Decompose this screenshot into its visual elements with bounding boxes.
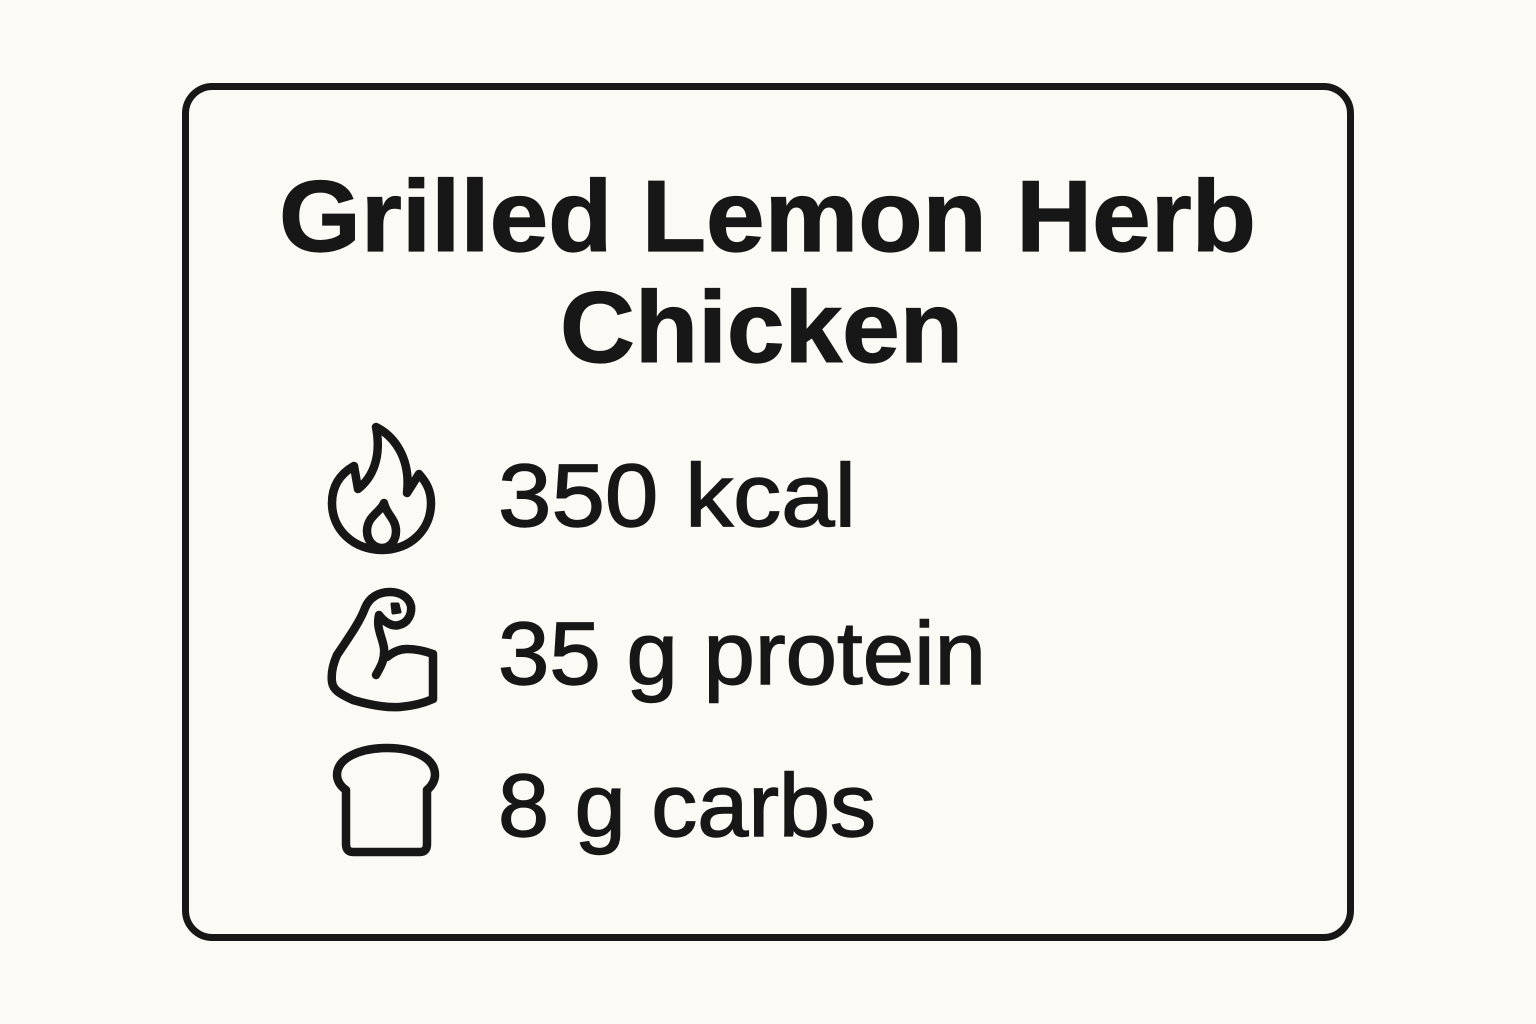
icon: bread slice	[337, 748, 435, 852]
panel: nutrition card	[186, 86, 1350, 938]
icon: flame	[332, 427, 431, 550]
text: carbs: 8 g carbs	[498, 755, 876, 855]
title: Chicken	[560, 272, 963, 384]
text: protein: 35 g protein	[498, 603, 986, 703]
icon: flexed bicep	[332, 592, 433, 707]
title: Grilled Lemon Herb	[279, 161, 1256, 273]
title	[279, 161, 1256, 384]
text: calories: 350 kcal	[498, 445, 856, 545]
